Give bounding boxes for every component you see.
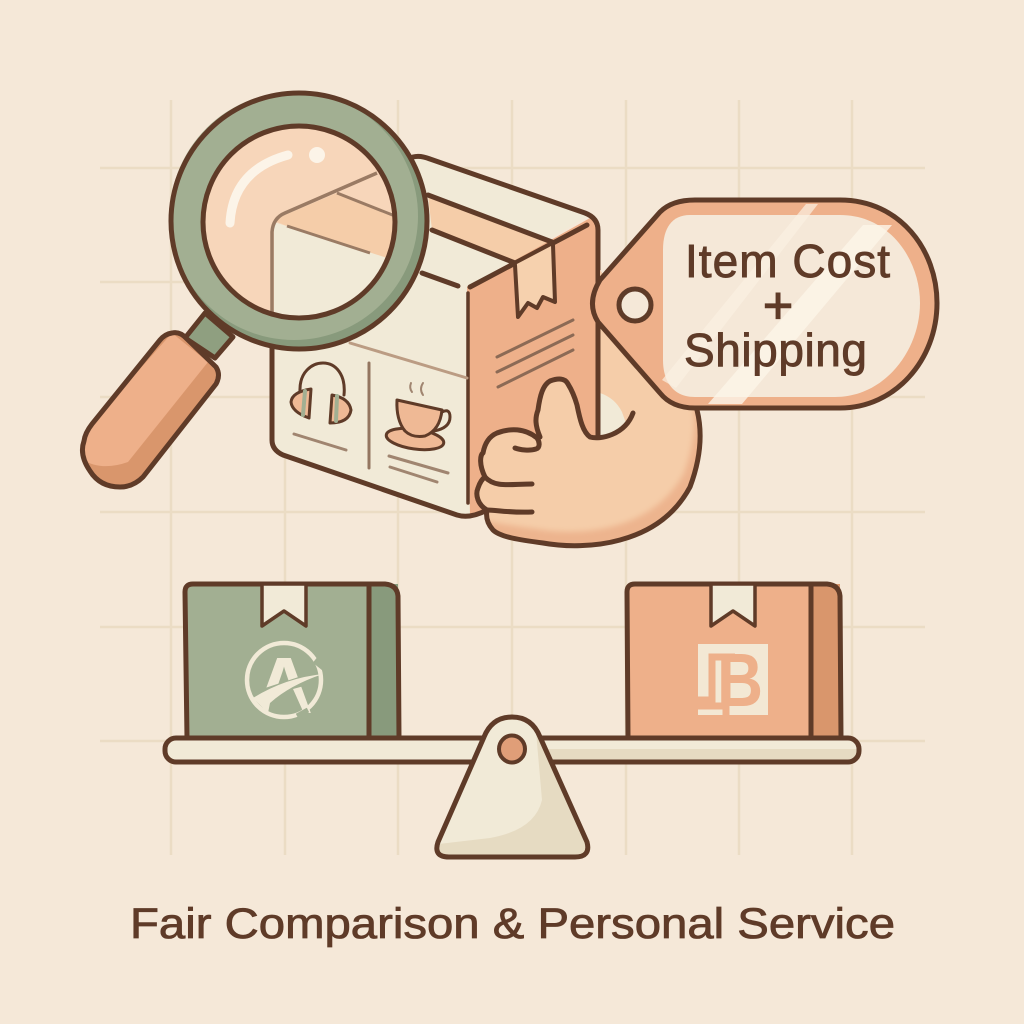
logo A: A [255, 641, 313, 730]
fulcrum pin [499, 736, 525, 762]
peach parcel B [627, 584, 841, 738]
scale beam [165, 738, 859, 762]
parcel flap tape [515, 245, 555, 317]
peach parcel front [628, 584, 811, 738]
side label lines [497, 320, 573, 387]
peach parcel outline [627, 584, 841, 738]
peach parcel bookmark [711, 584, 755, 626]
magnified lens view [206, 128, 392, 316]
tag body [592, 200, 937, 408]
icon: headphones [291, 363, 351, 423]
parcel tape band [428, 195, 552, 263]
scale fulcrum [430, 717, 588, 857]
front panel divider and seam [350, 343, 467, 468]
magnifier ring [170, 92, 427, 349]
green parcel side [366, 584, 398, 738]
logo B [698, 638, 768, 722]
hand shape [477, 270, 700, 546]
hand light area [479, 270, 696, 533]
tag outline [592, 200, 937, 408]
tag text: shipping: Shipping [684, 324, 867, 376]
lens highlight dot [309, 147, 325, 163]
background grid [100, 100, 925, 855]
peach parcel side [808, 584, 840, 738]
green parcel front [186, 584, 369, 738]
parcel top face [273, 156, 590, 287]
cup caption lines [389, 456, 448, 482]
tag text: item cost: Item Cost [685, 235, 890, 287]
magnifier handle [80, 333, 218, 487]
green parcel A [185, 584, 399, 738]
parcel held by hand [272, 156, 598, 517]
green parcel outline [185, 584, 399, 738]
headphones caption line [294, 434, 346, 450]
tag inner panel [663, 215, 920, 397]
balance scale [165, 584, 859, 857]
parcel outline [272, 156, 598, 516]
title: Fair Comparison & Personal Service [130, 900, 895, 948]
icon: coffee cup [385, 383, 450, 453]
parcel side face [467, 218, 598, 517]
lens highlight arc [230, 155, 288, 223]
parcel front face [272, 222, 470, 517]
logo A [245, 641, 330, 730]
magnifying glass [80, 92, 427, 487]
lens rim [203, 126, 395, 318]
hand outline [477, 300, 700, 546]
gap between fingers [600, 393, 627, 438]
tag hole [619, 289, 651, 321]
magnifier neck [185, 313, 233, 358]
tag glare stripes [662, 204, 892, 404]
logo B: B [717, 638, 763, 722]
hand holding parcel [464, 256, 700, 546]
tag text: plus: + [763, 277, 793, 335]
price tag [592, 200, 937, 408]
green parcel bookmark [262, 584, 306, 626]
